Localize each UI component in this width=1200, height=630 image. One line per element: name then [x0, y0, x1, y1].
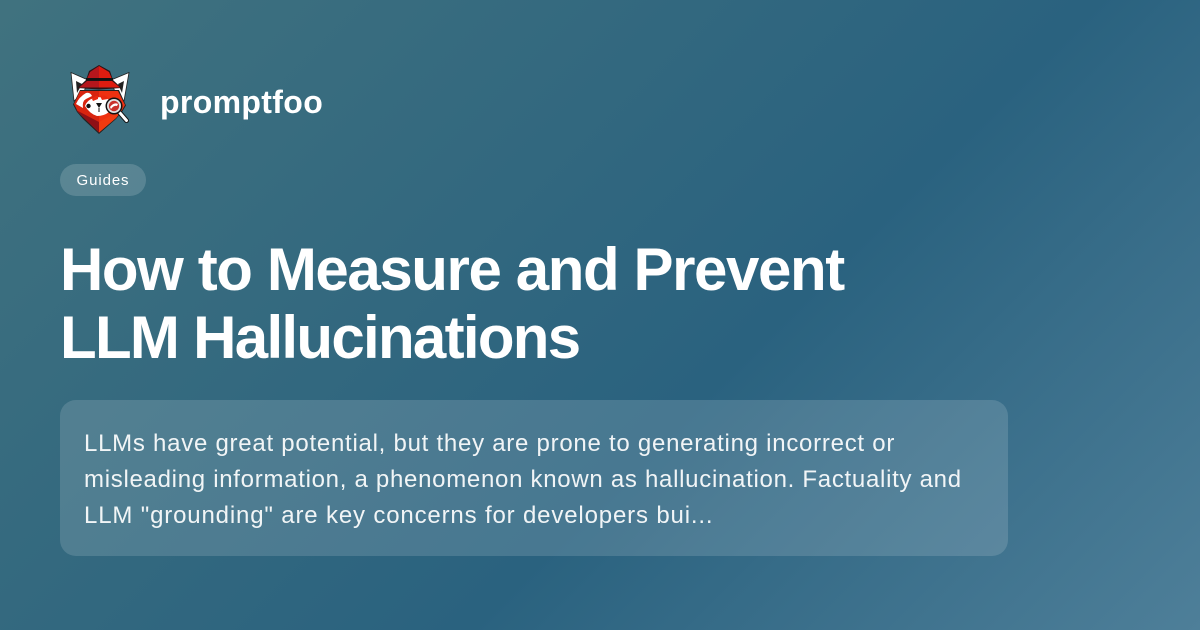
description text [84, 430, 962, 529]
ears [71, 72, 88, 101]
head [73, 90, 99, 134]
title: LLM Hallucinations [60, 304, 579, 371]
hat [78, 65, 122, 90]
description text: LLMs have great potential, but they are prone to generating incorrect or [84, 430, 895, 457]
magnifier [120, 113, 126, 120]
brand name: promptfoo [160, 84, 323, 120]
face markings [76, 93, 92, 108]
title: How to Measure and Prevent [60, 236, 844, 303]
description text: misleading information, a phenomenon known as hallucination. Factuality and [84, 466, 962, 493]
title [60, 236, 844, 371]
icon: red panda detective logo [70, 65, 130, 134]
description text: LLM "grounding" are key concerns for developers bui... [84, 502, 713, 529]
description panel [60, 400, 1008, 556]
category tag [60, 164, 146, 196]
category tag: Guides [77, 172, 129, 189]
